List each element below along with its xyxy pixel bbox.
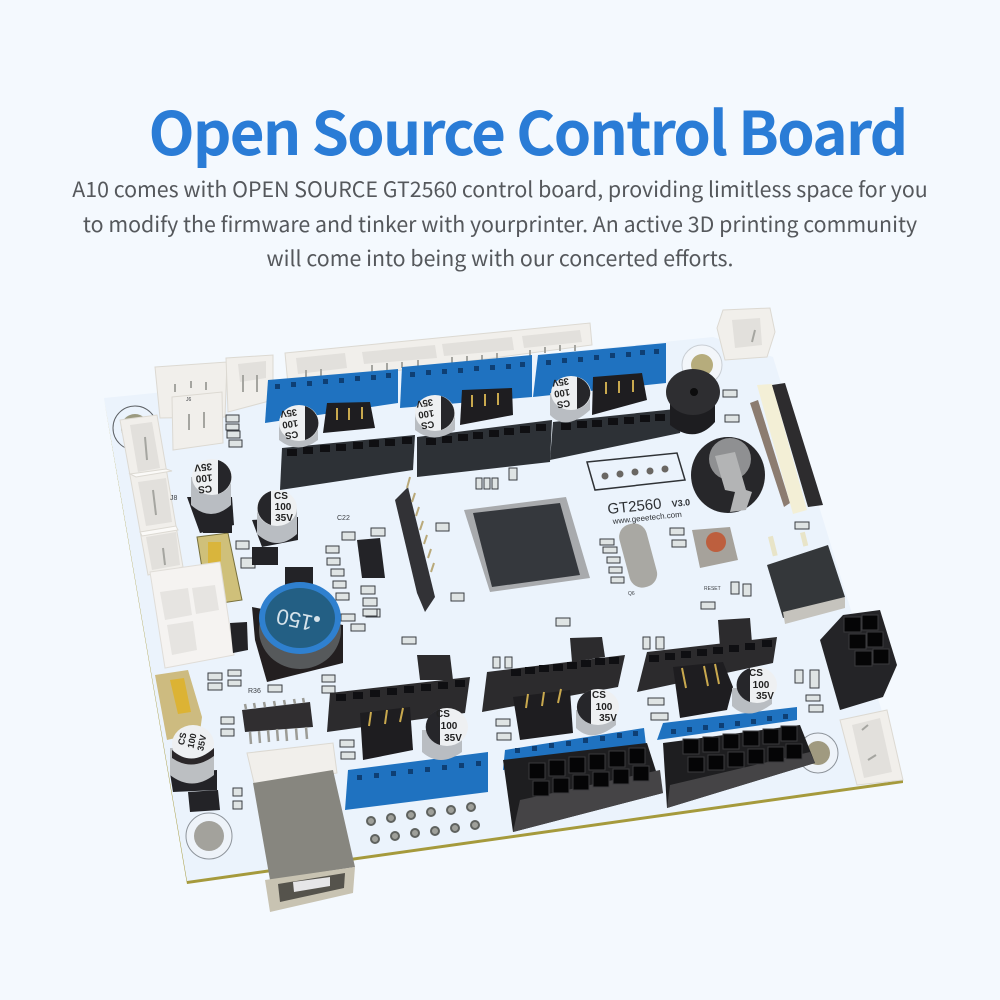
black box connectors — [503, 610, 897, 832]
usb connector — [247, 743, 355, 912]
capacitor c5: CS — [749, 668, 763, 679]
coin battery — [691, 437, 765, 513]
buzzer — [666, 369, 720, 434]
mounting holes — [113, 345, 838, 859]
capacitor c3: 35V — [444, 733, 462, 744]
capacitor 3: 100 — [553, 386, 571, 399]
capacitor 1: 100 — [281, 417, 299, 430]
capacitor c2: CS — [274, 491, 288, 502]
capacitor 3 — [550, 375, 591, 422]
capacitor c3: 100 — [441, 721, 458, 732]
capacitor c2 — [257, 490, 297, 543]
capacitor 1 — [279, 405, 319, 448]
five pin header footprint — [587, 453, 685, 490]
capacitor c4: 100 — [596, 702, 613, 713]
electrolytic capacitors top row — [279, 375, 591, 448]
capacitor c5: 100 — [753, 680, 770, 691]
ribbon connector — [750, 383, 823, 514]
capacitor 2: CS — [420, 418, 435, 431]
capacitor c2: 100 — [275, 502, 292, 513]
capacitor c3: CS — [436, 709, 450, 720]
through hole row — [367, 803, 479, 843]
title: Open Source Control Board — [148, 86, 907, 173]
capacitor c6 — [170, 725, 214, 784]
silkscreen labels: J6 — [186, 397, 192, 403]
capacitor c2: 35V — [275, 513, 293, 524]
capacitor c6: 35V — [195, 734, 208, 752]
capacitor c1: CS — [197, 482, 212, 495]
silkscreen labels: RESET — [704, 586, 721, 592]
blue header sockets — [275, 349, 788, 780]
board label: GT2560 — [607, 495, 662, 518]
white connectors top — [155, 308, 775, 450]
power fuses — [155, 533, 242, 740]
microcontroller chip — [464, 497, 590, 592]
description text: to modify the firmware and tinker with yourprinter. An active 3D printing community — [83, 208, 917, 238]
capacitor 3: 35V — [551, 375, 570, 388]
reset button — [692, 527, 738, 568]
capacitor c1: 35V — [193, 460, 212, 473]
black socket headers top — [280, 408, 685, 490]
small ic components — [170, 497, 385, 812]
capacitor 1: CS — [284, 428, 299, 441]
board label: V3.0 — [671, 497, 691, 509]
smd pads — [208, 390, 823, 809]
silkscreen labels: J8 — [170, 495, 178, 502]
silkscreen labels: C22 — [337, 515, 350, 522]
capacitor c5 — [732, 667, 777, 714]
socket header holes — [287, 412, 772, 701]
jumpers — [323, 373, 733, 760]
black socket headers bottom — [327, 618, 777, 732]
capacitor c3 — [422, 708, 468, 760]
capacitor 1: 35V — [279, 406, 298, 419]
crystal — [616, 520, 660, 590]
silkscreen labels: Q6 — [628, 591, 635, 597]
capacitor c4: CS — [592, 690, 606, 701]
capacitor c6: 100 — [186, 732, 198, 749]
inductor 150 — [252, 582, 343, 682]
adc pin header — [395, 477, 435, 612]
white power connector — [150, 562, 234, 668]
description text: A10 comes with OPEN SOURCE GT2560 control board, providing limitless space for you — [72, 173, 928, 204]
capacitor 2 — [415, 395, 455, 438]
capacitor c4: 35V — [599, 713, 617, 724]
board label — [607, 495, 691, 526]
electrolytic capacitors left and bottom — [170, 459, 777, 784]
capacitor c6: CS — [176, 732, 188, 746]
board label: www.geeetech.com — [611, 510, 683, 526]
chip pins — [245, 698, 307, 744]
capacitor 2: 35V — [415, 396, 434, 409]
description text — [72, 173, 928, 273]
connector pin grids — [529, 615, 889, 796]
regulator — [767, 532, 845, 624]
description text: will come into being with our concerted efforts. — [266, 242, 733, 273]
capacitor c5: 35V — [756, 691, 774, 702]
blue headers bottom — [345, 707, 797, 810]
capacitor 2: 100 — [417, 407, 435, 420]
capacitor c4 — [576, 689, 619, 735]
capacitor c1: 100 — [195, 471, 213, 484]
white connectors left and right — [120, 415, 903, 785]
board base — [104, 337, 903, 884]
silkscreen labels — [170, 397, 721, 695]
capacitor c1 — [191, 459, 232, 514]
jumper pins — [337, 380, 719, 726]
inductor 150: 150 — [274, 604, 315, 636]
capacitor 3: CS — [556, 397, 571, 410]
silkscreen labels: R36 — [248, 688, 261, 695]
blue headers top — [265, 343, 666, 423]
connector recesses and pins — [130, 318, 892, 778]
